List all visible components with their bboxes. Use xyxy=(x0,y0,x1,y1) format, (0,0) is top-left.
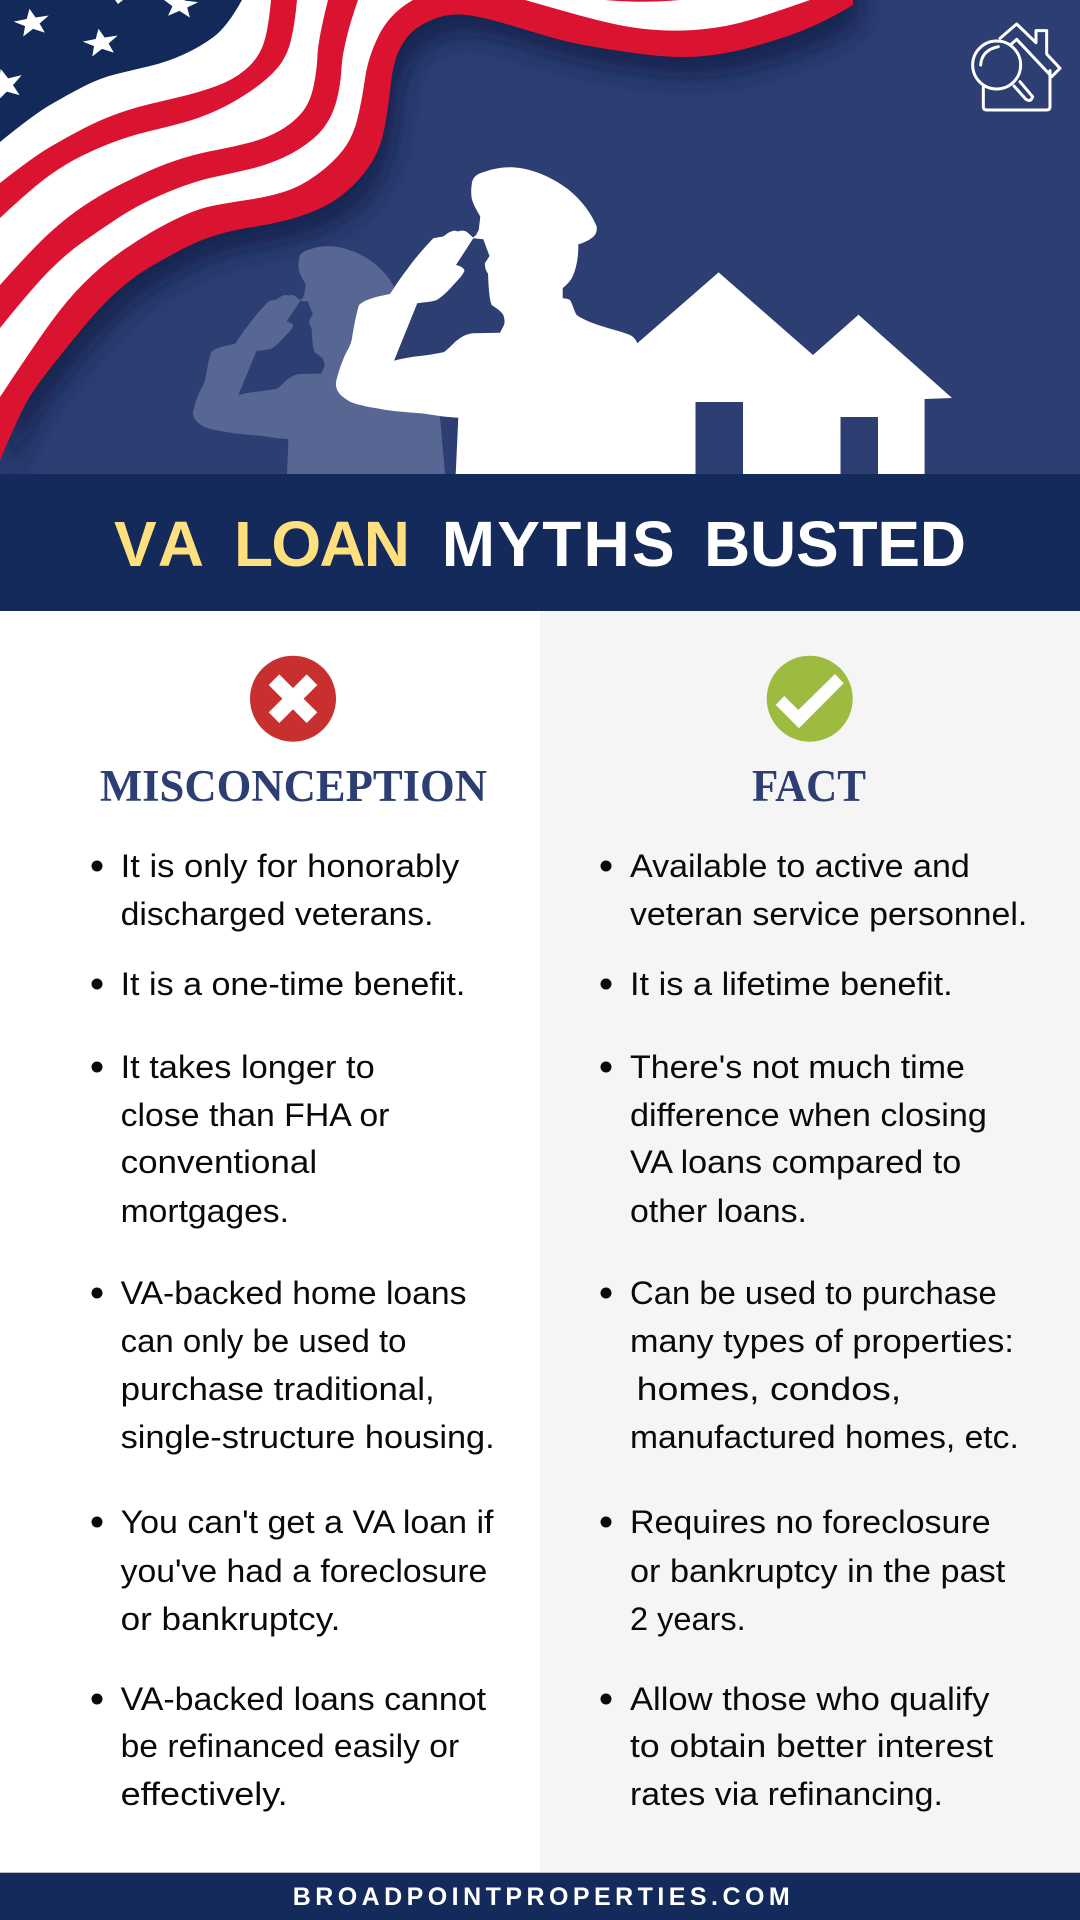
title: VA xyxy=(114,508,204,580)
fact: foreclosure window: Requires no foreclosure xyxy=(630,1504,991,1540)
white soldier saluting with house xyxy=(336,167,952,474)
fact: refinancing: Allow those who qualify xyxy=(630,1681,989,1717)
myth: traditional housing: can only be used to xyxy=(121,1323,406,1359)
fact: refinancing xyxy=(600,1681,993,1812)
fact: active and veteran xyxy=(600,848,1027,932)
ghost soldier silhouette xyxy=(193,246,445,474)
fact: refinancing: to obtain better interest xyxy=(630,1728,993,1764)
fact: property types: homes, condos, xyxy=(637,1371,901,1407)
myth: refinancing: VA-backed loans cannot xyxy=(121,1681,486,1717)
myth: foreclosure xyxy=(92,1504,494,1637)
flag xyxy=(0,0,853,460)
myth: takes longer: close than FHA or xyxy=(121,1097,390,1133)
fact: refinancing: rates via refinancing. xyxy=(630,1776,943,1812)
fact: active and veteran: veteran service personnel. xyxy=(630,896,1027,932)
fact: foreclosure window xyxy=(600,1504,1005,1637)
fact: property types: manufactured homes, etc. xyxy=(630,1419,1019,1455)
myth: refinancing: be refinanced easily or xyxy=(121,1728,460,1764)
fact: closing time: VA loans compared to xyxy=(630,1144,961,1180)
heading: misconception: MISCONCEPTION xyxy=(100,761,487,811)
fact: property types: Can be used to purchase xyxy=(630,1275,997,1311)
panel: misconception column xyxy=(92,656,495,1812)
title: LOAN xyxy=(234,508,410,580)
footer band xyxy=(0,1872,1080,1920)
myth: takes longer: conventional xyxy=(121,1144,317,1180)
icon: green check xyxy=(767,656,853,742)
myth: traditional housing: single-structure housing. xyxy=(121,1419,495,1455)
myth: refinancing xyxy=(92,1681,486,1812)
myth: traditional housing xyxy=(92,1275,495,1455)
flag shadow xyxy=(9,0,862,480)
myth: foreclosure: or bankruptcy. xyxy=(121,1601,340,1637)
icon: house with magnifier xyxy=(973,24,1060,110)
header background xyxy=(0,0,1080,474)
footer website: BROADPOINTPROPERTIES.COM xyxy=(293,1883,790,1911)
fact: foreclosure window: 2 years. xyxy=(630,1601,746,1637)
myth: honorably discharged: discharged veterans. xyxy=(121,896,434,932)
myth: takes longer: It takes longer to xyxy=(121,1049,375,1085)
heading: fact: FACT xyxy=(752,761,866,811)
fact: property types: many types of properties: xyxy=(630,1323,1014,1359)
myth: foreclosure: You can't get a VA loan if xyxy=(121,1504,494,1540)
title xyxy=(114,508,966,580)
myth: refinancing: effectively. xyxy=(121,1776,288,1812)
panel: fact column xyxy=(600,656,1027,1812)
fact: foreclosure window: or bankruptcy in the past xyxy=(630,1553,1005,1589)
myth: takes longer xyxy=(92,1049,390,1229)
myth: honorably discharged xyxy=(92,848,459,932)
myth: one-time benefit: It is a one-time benefit. xyxy=(121,966,465,1002)
myth: traditional housing: purchase traditional, xyxy=(121,1371,435,1407)
fact: active and veteran: Available to active and xyxy=(630,848,970,884)
fact: closing time: There's not much time xyxy=(630,1049,965,1085)
myth: traditional housing: VA-backed home loans xyxy=(121,1275,466,1311)
icon: red cross xyxy=(250,656,336,742)
title: MYTHS xyxy=(442,508,675,580)
myth: honorably discharged: It is only for honorably xyxy=(121,848,459,884)
fact: lifetime benefit: It is a lifetime benefit. xyxy=(630,966,953,1002)
title: BUSTED xyxy=(704,508,966,580)
fact: closing time xyxy=(600,1049,987,1229)
fact: closing time: other loans. xyxy=(630,1193,807,1229)
fact: closing time: difference when closing xyxy=(630,1097,987,1133)
myth: foreclosure: you've had a foreclosure xyxy=(121,1553,487,1589)
panel: fact background xyxy=(540,611,1080,1873)
title band xyxy=(0,474,1080,611)
fact: property types xyxy=(600,1275,1019,1455)
myth: takes longer: mortgages. xyxy=(121,1193,289,1229)
